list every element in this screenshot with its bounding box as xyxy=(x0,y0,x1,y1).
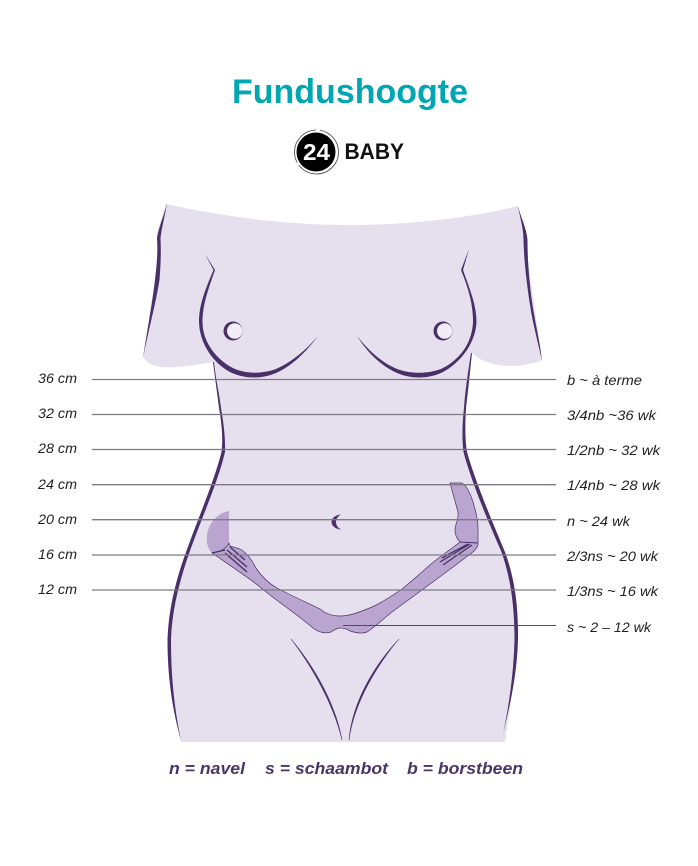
logo: 24 Baby: BABY xyxy=(344,139,404,164)
left cm labels: 28 cm xyxy=(37,440,77,456)
left cm labels: 20 cm xyxy=(37,511,77,527)
left cm labels: 16 cm xyxy=(38,546,77,562)
left uterus wing xyxy=(207,511,229,553)
left cm labels: 12 cm xyxy=(38,581,77,597)
legend: b = borstbeen xyxy=(407,759,523,778)
right arm outline xyxy=(518,206,542,361)
logo: 24 Baby: 24 xyxy=(303,139,330,165)
right nipple xyxy=(434,322,452,340)
left cm labels: 24 cm xyxy=(37,476,77,492)
left ridges xyxy=(212,547,247,572)
right week labels: 3/4nb ~36 wk xyxy=(567,407,657,423)
torso silhouette xyxy=(143,204,542,742)
left cm labels: 36 cm xyxy=(38,370,77,386)
right week labels: 1/3ns ~ 16 wk xyxy=(567,583,659,599)
right week labels: n ~ 24 wk xyxy=(567,513,631,529)
navel xyxy=(332,514,341,530)
left breast outline xyxy=(199,254,318,378)
right week labels: 2/3ns ~ 20 wk xyxy=(566,548,659,564)
legend: s = schaambot xyxy=(265,759,389,778)
right week labels: 1/2nb ~ 32 wk xyxy=(567,442,661,458)
logo: 24 Baby xyxy=(294,130,404,174)
left cm labels: 32 cm xyxy=(38,405,77,421)
right breast outline xyxy=(357,249,476,378)
title: Fundushoogte xyxy=(232,73,468,111)
left waist line xyxy=(168,362,225,740)
left nipple xyxy=(224,322,242,340)
legend xyxy=(169,759,523,778)
body figure xyxy=(143,203,542,742)
uterus and pelvis xyxy=(207,483,478,633)
uterus band xyxy=(212,483,478,633)
left cm labels xyxy=(37,370,77,597)
right week labels: b ~ à terme xyxy=(567,372,642,388)
legend: n = navel xyxy=(169,759,246,778)
measurement lines xyxy=(92,380,556,626)
left groin line xyxy=(291,639,342,740)
right groin line xyxy=(349,639,399,740)
right waist line xyxy=(462,353,518,734)
right week labels: 1/4nb ~ 28 wk xyxy=(567,477,661,493)
left arm outline xyxy=(143,203,167,358)
right week labels: s ~ 2 – 12 wk xyxy=(567,619,652,635)
right ridges xyxy=(440,544,472,565)
right week labels xyxy=(566,372,661,635)
